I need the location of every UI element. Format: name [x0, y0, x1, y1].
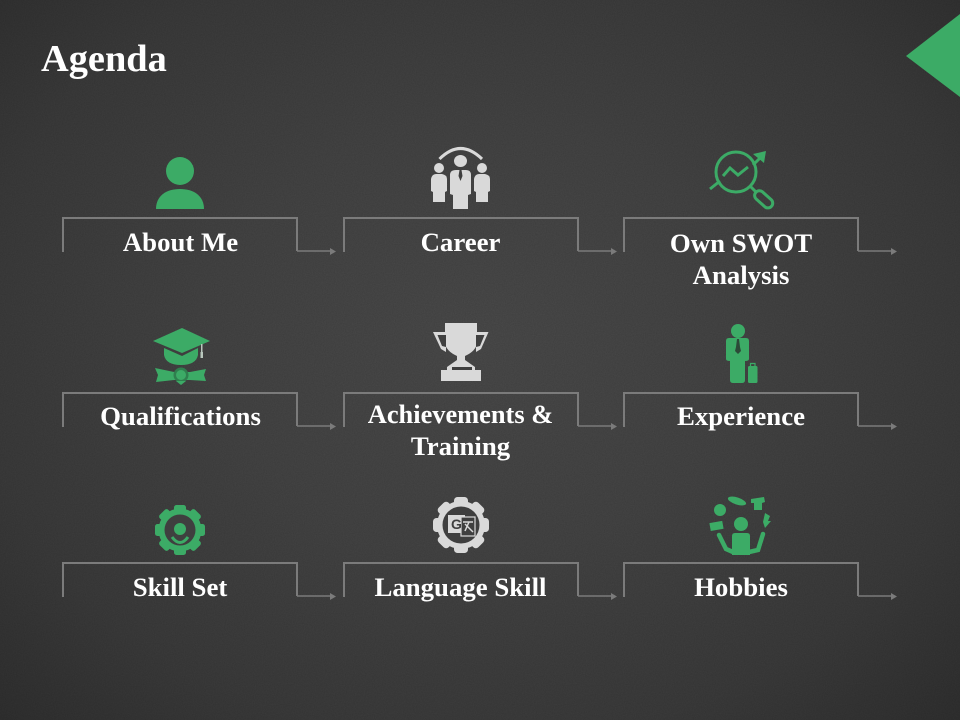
frame and arrow: Skill Set	[63, 563, 336, 600]
title: Agenda	[41, 38, 167, 80]
item: Qualifications	[63, 328, 336, 431]
corner triangle	[906, 14, 960, 97]
item: Language Skill	[344, 497, 617, 602]
label: Own SWOT Analysis	[670, 228, 812, 290]
icon: team	[431, 148, 490, 209]
label: Skill Set: Skill Set	[133, 572, 227, 602]
label: Experience: Experience	[677, 401, 805, 431]
icon: trophy	[433, 323, 488, 381]
frame and arrow: About Me	[63, 218, 336, 255]
icon: person	[156, 157, 204, 209]
label: Career: Career	[421, 227, 501, 257]
label: About Me: About Me	[123, 227, 238, 257]
label: Language Skill: Language Skill	[374, 572, 547, 602]
frame and arrow: Hobbies	[624, 563, 897, 600]
label: Achievements & Training: Achievements &	[368, 399, 553, 429]
item: About Me	[63, 157, 336, 257]
label: Own SWOT Analysis: Own SWOT	[670, 228, 812, 258]
frame and arrow: Qualifications	[63, 393, 336, 430]
item: Skill Set	[63, 505, 336, 602]
icon: businessman with suitcase	[726, 324, 758, 383]
item: Hobbies	[624, 495, 897, 602]
item: Own SWOT Analysis	[624, 151, 897, 290]
label: Qualifications: Qualifications	[100, 401, 261, 431]
frame and arrow: Achievements	[344, 393, 617, 430]
icon: gear with person	[155, 505, 205, 555]
frame and arrow: Career	[344, 218, 617, 255]
item: Achievements & Training	[344, 323, 617, 461]
label: Own SWOT Analysis: Analysis	[693, 260, 789, 290]
icon: graduation cap and diploma	[153, 328, 210, 385]
frame and arrow: Language Skill	[344, 563, 617, 600]
frame and arrow: Experience	[624, 393, 897, 430]
item: Career	[344, 148, 617, 257]
label: Achievements & Training	[368, 399, 553, 461]
label: Hobbies: Hobbies	[694, 572, 788, 602]
label: Achievements & Training: Training	[411, 431, 511, 461]
icon: magnifier chart	[710, 151, 775, 210]
frame and arrow: SWOT	[624, 218, 897, 255]
icon: person juggling	[709, 495, 771, 555]
item: Experience	[624, 324, 897, 431]
icon: gear with translate: G	[451, 516, 462, 532]
icon: gear with translate	[433, 497, 489, 553]
